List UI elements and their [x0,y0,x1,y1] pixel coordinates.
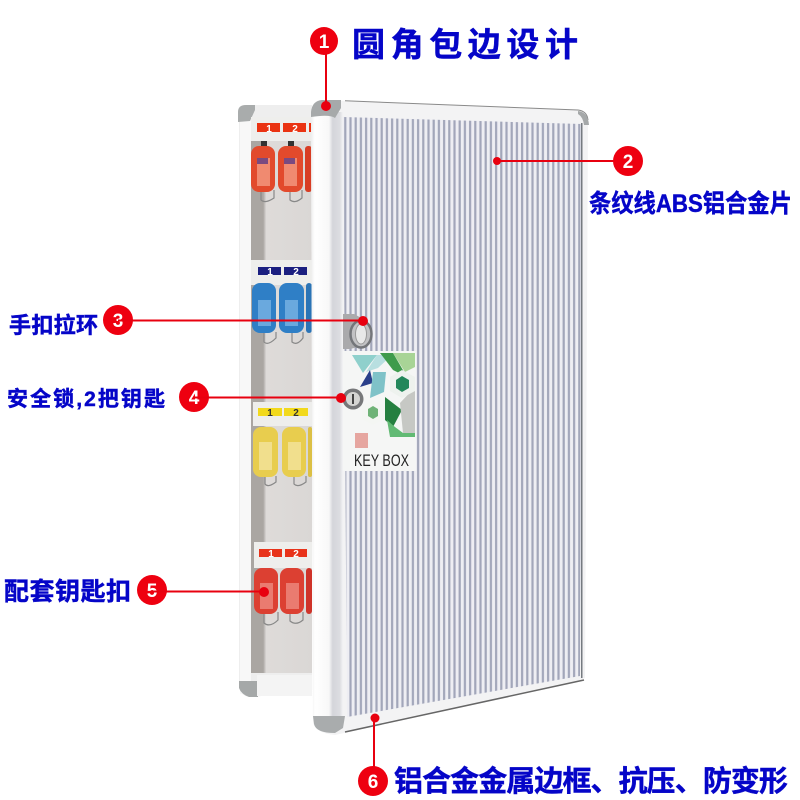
key row: yellow [253,402,312,486]
label 3: 手扣拉环 [9,313,98,338]
callout 2 [493,146,643,176]
corner cap: cabinet top [238,105,255,122]
corner cap: door top right [578,111,589,125]
callout 3: 3 [113,311,123,332]
sticker: key box [343,351,416,471]
key row: red bottom [254,542,312,625]
cabinet door [311,100,589,735]
key row: red top: 2 [292,124,298,135]
callout 1: 1 [319,32,330,53]
corner cap: cabinet bottom [239,681,258,697]
callout 6: 6 [368,772,378,793]
key row: red top [251,117,312,202]
label 4: 安全锁,2把钥匙 [7,387,165,411]
key row: red bottom: 1 [268,549,274,560]
callout 6 [358,714,388,796]
label 5: 配套钥匙扣 [4,578,131,606]
corner cap: door top left [311,100,341,118]
callout 2: 2 [623,152,633,173]
key row: red bottom: 2 [293,549,299,560]
corner cap: door bottom left [313,716,345,733]
callout 1 [310,27,338,111]
door left frame [311,112,343,723]
ribbed aluminium panel [343,117,582,717]
key row: yellow: 1 [267,408,273,419]
key row: blue: 2 [293,267,299,278]
finger pull ring [343,314,372,349]
key row: red top: 1 [266,124,272,135]
QR code [355,433,368,448]
callout 4: 4 [189,388,200,409]
callout 5 [137,575,269,605]
key row: blue [251,260,312,343]
key row: blue: 1 [267,267,273,278]
security lock [342,388,364,410]
cabinet body [238,105,312,697]
key row: yellow: 2 [293,408,299,419]
callout 4 [179,382,346,412]
label 6: 铝合金金属边框、抗压、防变形 [394,765,788,798]
sticker text: KEY BOX [354,451,409,470]
callout 3 [103,305,368,335]
callout 5: 5 [147,581,158,602]
title: 圆角包边设计 [352,26,584,63]
